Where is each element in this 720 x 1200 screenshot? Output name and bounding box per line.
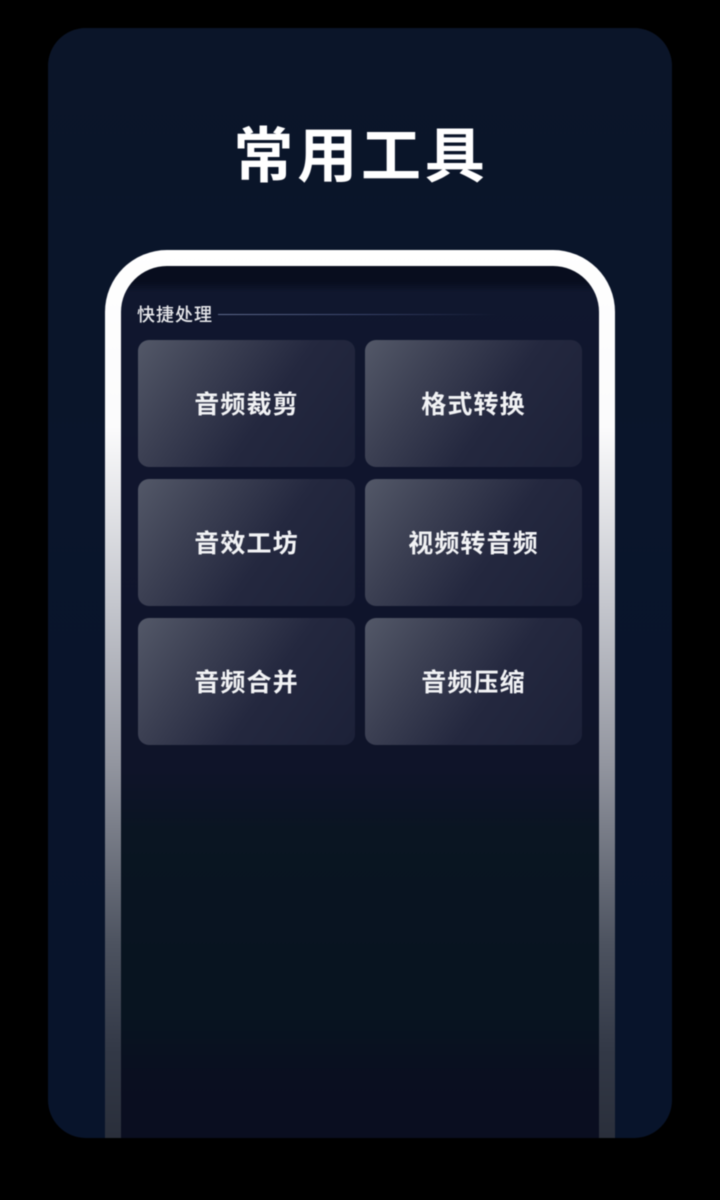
- section heading line: [218, 314, 498, 315]
- tool tile: audio compression: [365, 618, 582, 745]
- section heading: 快捷处理: [137, 305, 213, 325]
- tool tile: format conversion: 格式转换: [421, 391, 526, 419]
- tool tile: sound effects: 音效工坊: [194, 530, 299, 558]
- tool tile: audio trim: 音频裁剪: [194, 391, 299, 419]
- tool tile: audio merge: [138, 618, 355, 745]
- title: 常用工具: [233, 123, 489, 190]
- tool tile: audio merge: 音频合并: [194, 669, 299, 697]
- tool tile: video to audio: [365, 479, 582, 606]
- tool tile: format conversion: [365, 340, 582, 467]
- tool tile: audio compression: 音频压缩: [421, 669, 526, 697]
- phone screen: [121, 266, 599, 1138]
- tool tile: audio trim: [138, 340, 355, 467]
- tool tile: sound effects: [138, 479, 355, 606]
- phone frame: [105, 250, 615, 1138]
- tool tile: video to audio: 视频转音频: [408, 530, 539, 558]
